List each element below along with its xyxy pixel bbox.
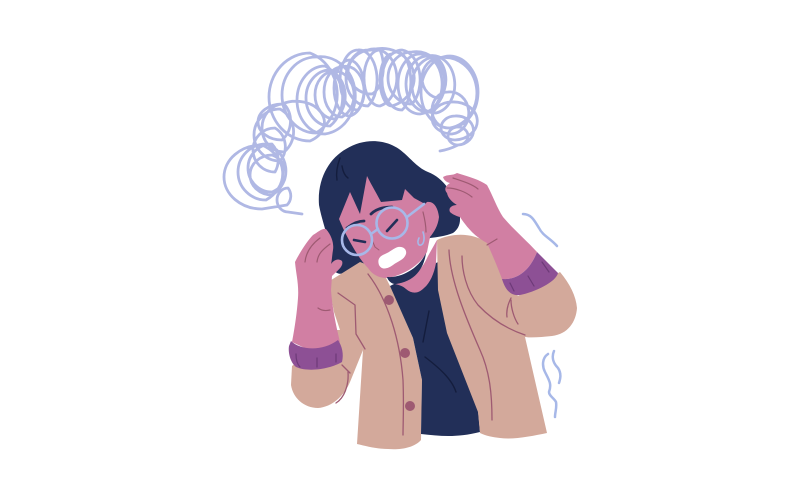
face: [339, 176, 439, 278]
icon: tangled scribble above head: [224, 49, 478, 214]
left arm sleeve: [291, 330, 363, 408]
eyes: [354, 220, 397, 242]
neck: [395, 240, 437, 293]
sweat drop: [418, 232, 424, 245]
shake lines: [523, 214, 560, 417]
shirt: [390, 262, 480, 436]
nose: [372, 240, 379, 250]
left hand lines: [305, 238, 330, 311]
buttons: [384, 295, 415, 411]
right cuff: [502, 252, 558, 295]
jacket left body: [328, 262, 422, 449]
jacket right body and arm: [437, 235, 577, 439]
hair: [319, 141, 460, 274]
jacket seams: [336, 250, 525, 435]
eyebrows: [347, 207, 392, 228]
left hand and forearm: [292, 229, 342, 352]
mouth: [378, 247, 406, 268]
right hand lines: [447, 178, 497, 245]
chin shadow: [387, 253, 426, 284]
ear line: [423, 212, 426, 232]
left cuff: [289, 340, 343, 370]
glasses: [342, 204, 424, 255]
shirt folds: [423, 311, 456, 392]
hair strands: [337, 158, 348, 180]
right hand and forearm: [443, 173, 537, 279]
left cuff ribs: [296, 354, 336, 367]
right cuff ribs: [510, 262, 549, 291]
